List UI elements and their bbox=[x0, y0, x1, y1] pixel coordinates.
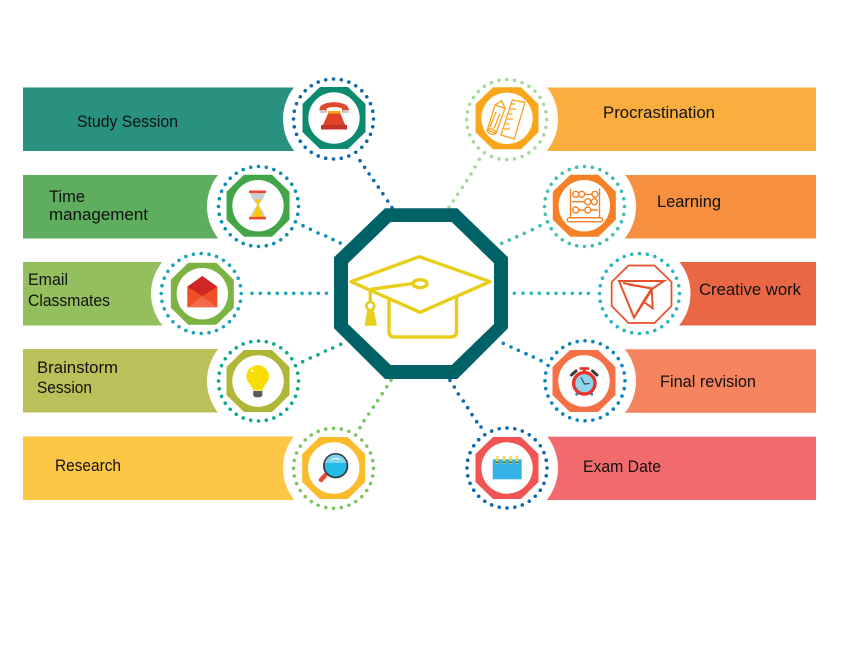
panel: Time management: management bbox=[49, 205, 148, 224]
panel: Procrastination bbox=[456, 68, 816, 170]
panel: Brainstorm Session bbox=[23, 330, 309, 432]
panel: Final revision bbox=[534, 330, 816, 432]
panel: Email Classmates: Classmates bbox=[28, 291, 110, 310]
label: Time bbox=[49, 187, 85, 206]
icon: light bulb bbox=[246, 365, 269, 397]
icon: hourglass bbox=[249, 190, 266, 219]
panel: Research bbox=[23, 417, 385, 519]
connector: Creative work bbox=[514, 291, 588, 295]
panel: Exam Date bbox=[456, 417, 816, 519]
panel: Time management bbox=[23, 156, 309, 258]
connector: Procrastination bbox=[449, 159, 479, 207]
label: Learning bbox=[657, 192, 721, 211]
panel: Brainstorm Session: Session bbox=[37, 378, 92, 397]
icon: alarm clock bbox=[572, 367, 597, 396]
label: Research bbox=[55, 456, 121, 475]
connector: Email Classmates bbox=[252, 291, 327, 295]
panel: Learning bbox=[534, 156, 816, 258]
connector: Learning bbox=[502, 226, 540, 243]
icon: magnifier bbox=[321, 454, 348, 480]
connector: Time management bbox=[303, 226, 340, 243]
icon: graduation cap bbox=[351, 257, 490, 337]
panel: Creative work bbox=[590, 243, 816, 344]
label: Final revision bbox=[660, 372, 756, 391]
connector: Brainstorm Session bbox=[303, 344, 341, 362]
central octagon with graduation cap bbox=[334, 208, 508, 379]
icon: calendar bbox=[493, 457, 522, 479]
label: Procrastination bbox=[603, 103, 715, 122]
icon: telephone bbox=[320, 102, 349, 130]
panel: Study Session bbox=[23, 68, 385, 170]
connector: Exam Date bbox=[450, 380, 481, 427]
connector: Final revision bbox=[503, 343, 541, 361]
icon: abacus bbox=[567, 188, 603, 222]
panel: Email Classmates bbox=[23, 244, 251, 344]
icon: envelope bbox=[187, 276, 217, 307]
connector: Study Session bbox=[360, 161, 392, 208]
label: Study Session bbox=[77, 112, 178, 131]
connector: Research bbox=[360, 380, 391, 428]
icon: pencil and ruler bbox=[486, 100, 525, 139]
icon: paper plane bbox=[619, 281, 664, 318]
label: Email bbox=[28, 270, 68, 289]
label: Exam Date bbox=[583, 457, 661, 476]
label: Creative work bbox=[699, 280, 801, 299]
label: Brainstorm bbox=[37, 358, 118, 377]
